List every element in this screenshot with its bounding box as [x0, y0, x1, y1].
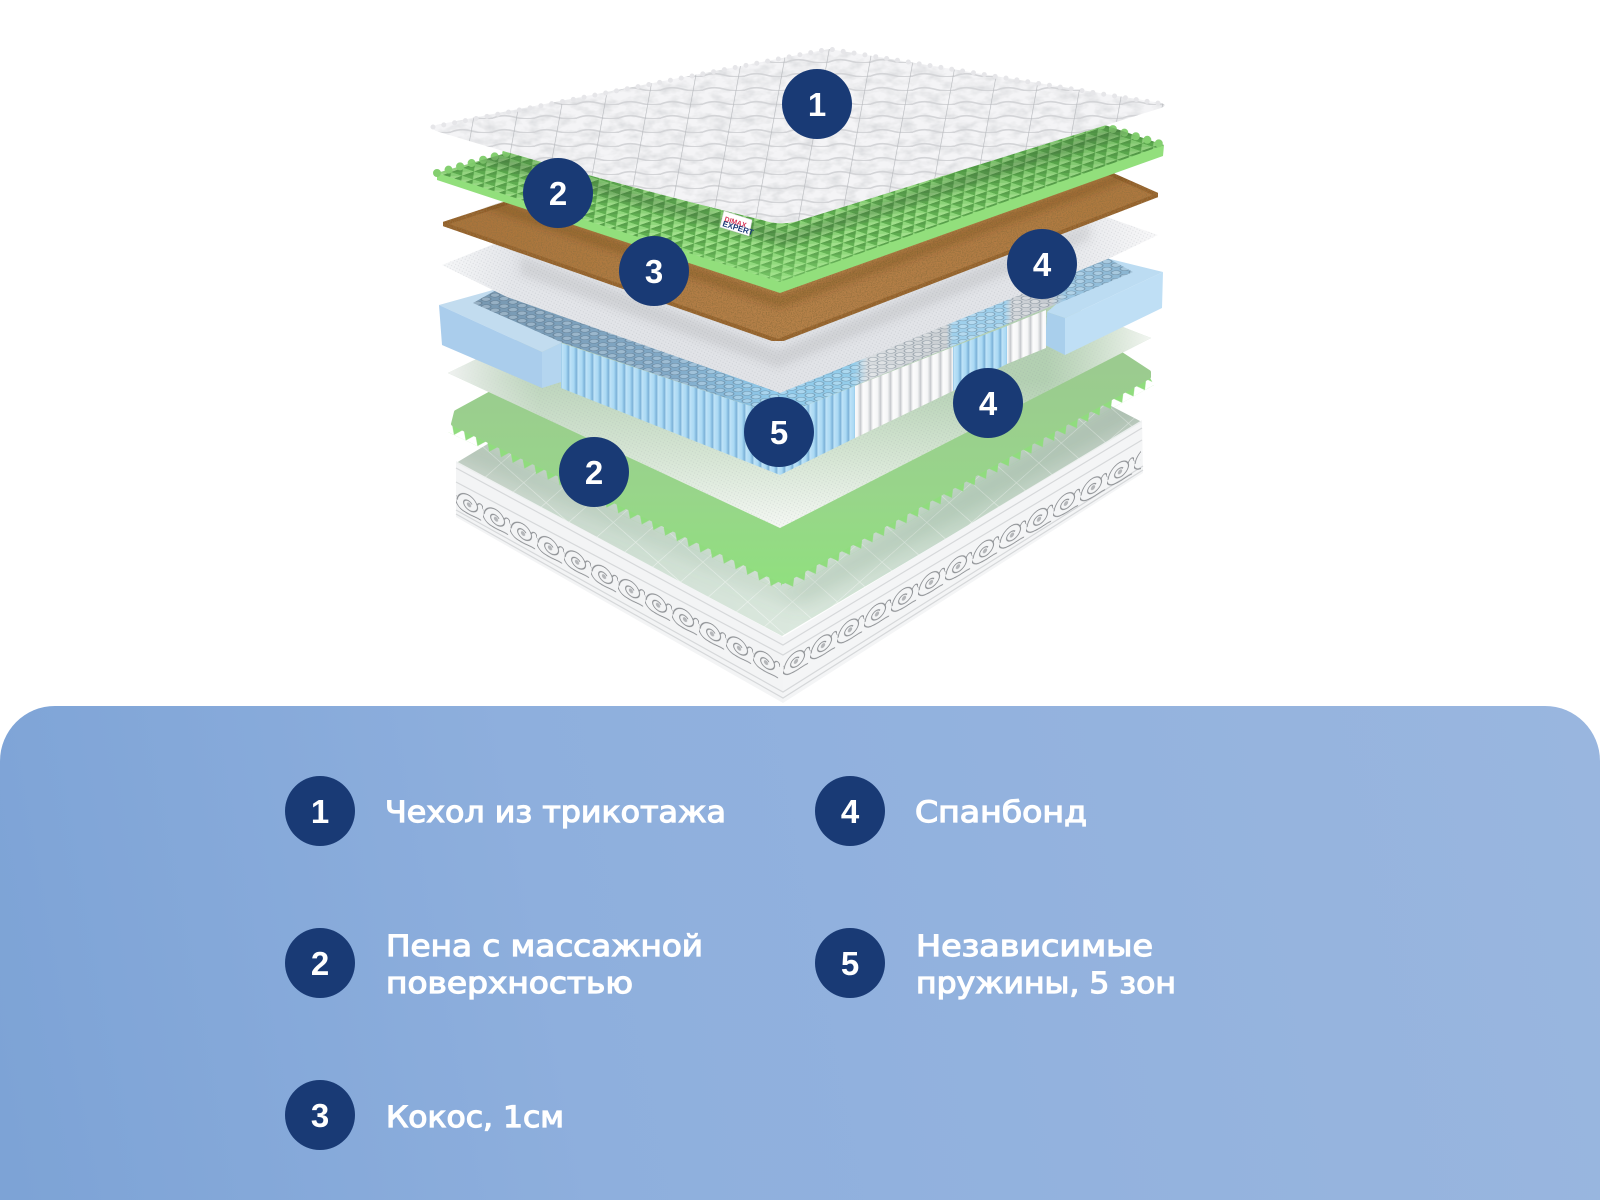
callout badges on the illustration — [523, 69, 1077, 507]
cover brand tag — [720, 211, 755, 237]
bottom blue panel — [0, 706, 1600, 1200]
legend item 3: coconut: Кокос, 1см — [386, 1100, 564, 1134]
badge 4 upper — [1007, 229, 1077, 299]
legend item 1: cover: 1 — [311, 793, 329, 830]
badge 4 upper: 4 — [1033, 246, 1052, 283]
layer: lower massage foam with sawtooth edge — [448, 340, 1154, 606]
legend — [285, 776, 1176, 1150]
legend item 1: cover — [285, 776, 726, 846]
legend item 2: massage foam: 2 — [311, 945, 329, 982]
layer: upper spunbond sheet — [442, 115, 1158, 393]
badge 1 — [782, 69, 852, 139]
badge 4 lower: 4 — [979, 385, 998, 422]
badge 5: 5 — [770, 414, 788, 451]
badge 2 upper — [523, 158, 593, 228]
legend item 4: spunbond: Спанбонд — [915, 795, 1087, 829]
mattress illustration — [433, 49, 1164, 703]
layer: lower spunbond sheet — [448, 200, 1151, 528]
cover brand tag: DIMAX — [723, 216, 747, 230]
badge 5 — [744, 397, 814, 467]
badge 2 lower — [559, 437, 629, 507]
badge 3: 3 — [645, 253, 663, 290]
layer: coconut fibre board — [443, 174, 1158, 368]
legend item 2: massage foam: Пена с массажной — [386, 929, 703, 963]
legend item 5: springs: пружины, 5 зон — [916, 966, 1176, 1000]
legend item 2: massage foam: поверхностью — [386, 966, 633, 1000]
badge 2 upper: 2 — [549, 175, 567, 212]
badge 4 lower — [953, 368, 1023, 438]
legend item 5: springs — [815, 928, 1176, 1000]
legend item 5: springs: Независимые — [916, 929, 1153, 963]
layer: mattress base with quilted side border — [456, 250, 1143, 703]
legend item 4: spunbond: 4 — [841, 793, 860, 830]
legend item 3: coconut: 3 — [311, 1097, 329, 1134]
legend item 4: spunbond — [815, 776, 1087, 846]
cover brand tag: EXPERT — [721, 219, 755, 237]
layer: upper massage foam, egg-crate surface — [433, 125, 1164, 309]
layer: knitted quilted cover — [433, 49, 1164, 246]
legend item 2: massage foam — [285, 928, 703, 1000]
badge 2 lower: 2 — [585, 454, 603, 491]
legend item 5: springs: 5 — [841, 945, 859, 982]
badge 1: 1 — [808, 86, 826, 123]
badge 3 — [619, 236, 689, 306]
layer: independent pocket springs with foam frame — [439, 120, 1163, 475]
legend item 1: cover: Чехол из трикотажа — [385, 795, 726, 829]
legend item 3: coconut — [285, 1080, 564, 1150]
